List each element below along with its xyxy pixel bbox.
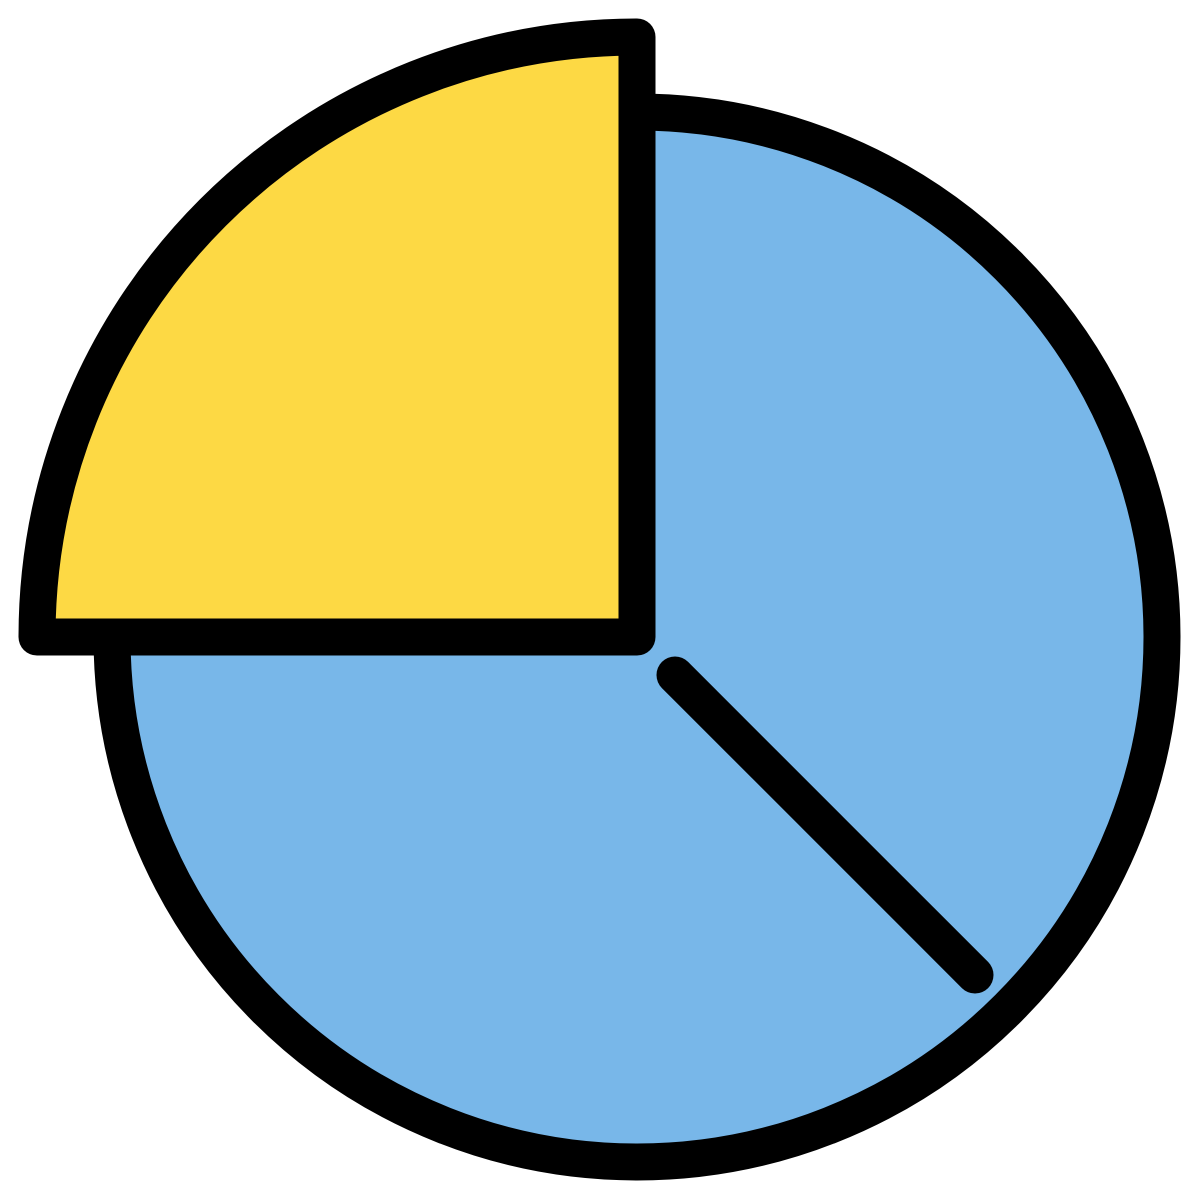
pie body: blue circle bbox=[112, 112, 1162, 1162]
pie slice: yellow exploded quarter bbox=[37, 37, 637, 637]
divider line bbox=[675, 675, 975, 975]
